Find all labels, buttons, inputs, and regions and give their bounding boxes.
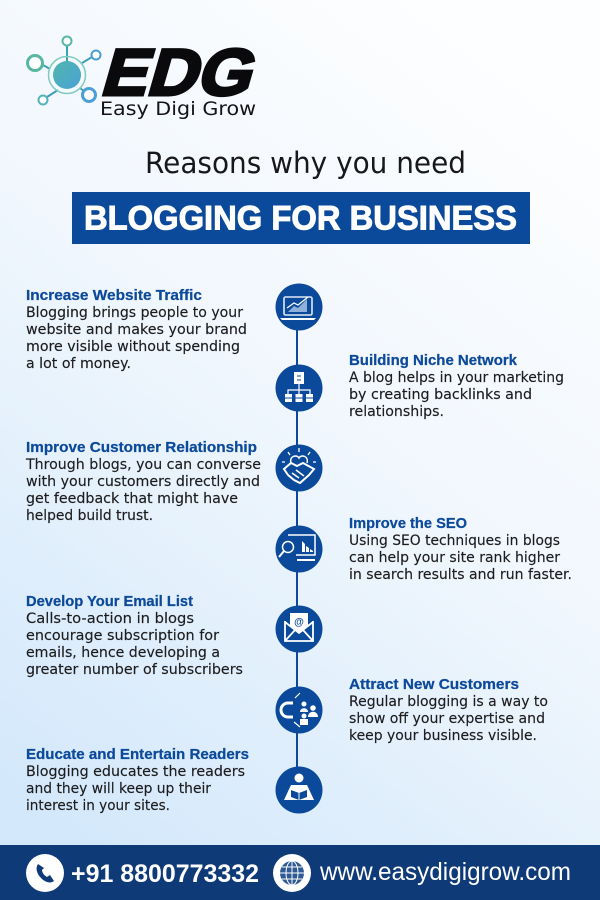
item: Improve Customer Relationship (25, 439, 261, 524)
icon: globe (273, 854, 311, 892)
item: Attract New Customers (349, 676, 548, 744)
item: Building Niche Network: by creating backlinks and (349, 387, 532, 403)
item: Improve the SEO: can help your site rank higher (349, 550, 560, 566)
item: Improve the SEO: Improve the SEO (349, 515, 467, 532)
item: Increase Website Traffic: website and makes your brand (26, 322, 247, 338)
item: Improve Customer Relationship: get feedback that might have (26, 491, 238, 507)
item: Improve the SEO (349, 515, 572, 583)
item: Building Niche Network (349, 352, 564, 420)
title: Reasons why you need (145, 146, 466, 180)
item: Increase Website Traffic (26, 287, 247, 372)
item: Develop Your Email List: emails, hence developing a (26, 645, 220, 661)
icon: handshake (276, 444, 322, 492)
item: Improve Customer Relationship: Through blogs, you can converse (25, 457, 261, 473)
title banner: BLOGGING FOR BUSINESS (84, 200, 517, 238)
item: Attract New Customers: keep your business visible. (349, 728, 537, 744)
item: Increase Website Traffic: Increase Website Traffic (26, 287, 202, 304)
item: Educate and Entertain Readers: and they will keep up their (26, 781, 211, 797)
item: Educate and Entertain Readers: Educate and Entertain Readers (26, 746, 249, 763)
item: Increase Website Traffic: a lot of money. (26, 356, 131, 372)
item: Improve Customer Relationship: with your customers directly and (26, 474, 260, 490)
item: Develop Your Email List: Develop Your Email List (26, 593, 193, 610)
footer bar (0, 845, 600, 900)
item: Improve the SEO: in search results and run faster. (349, 567, 572, 583)
icon: building network (276, 364, 322, 412)
icon: email envelope (276, 606, 322, 652)
item: Develop Your Email List: Calls-to-action in blogs (26, 611, 194, 627)
item: Improve Customer Relationship: helped build trust. (26, 508, 153, 524)
item: Building Niche Network: A blog helps in your marketing (349, 370, 564, 386)
icon: laptop chart (276, 284, 322, 330)
logo tagline: Easy Digi Grow (100, 98, 256, 120)
item: Increase Website Traffic: more visible without spending (26, 339, 240, 355)
item: Develop Your Email List (26, 593, 243, 678)
timeline (276, 284, 322, 814)
item: Attract New Customers: Attract New Customers (349, 676, 519, 693)
item: Educate and Entertain Readers: Blogging educates the readers (26, 764, 245, 780)
item: Improve Customer Relationship: Improve Customer Relationship (26, 439, 257, 456)
item: Educate and Entertain Readers: interest in your sites. (26, 798, 170, 814)
item: Develop Your Email List: greater number of subscribers (26, 662, 243, 678)
logo (28, 36, 266, 120)
item: Improve the SEO: Using SEO techniques in blogs (349, 533, 560, 549)
item: Increase Website Traffic: Blogging brings people to your (26, 305, 243, 321)
logo icon: network node (28, 36, 100, 104)
timeline line (296, 307, 298, 790)
item: Building Niche Network: relationships. (349, 404, 444, 420)
item: Attract New Customers: Regular blogging is a way to (349, 694, 548, 710)
icon: phone (26, 854, 64, 892)
icon: email envelope: @ (294, 617, 304, 628)
item: Building Niche Network: Building Niche Network (349, 352, 518, 369)
icon: magnet and customers (276, 686, 322, 734)
item: Develop Your Email List: encourage subscription for (26, 628, 219, 644)
item: Educate and Entertain Readers (26, 746, 249, 814)
phone number: +91 8800773332 (71, 860, 259, 888)
website: www.easydigigrow.com (319, 858, 571, 886)
logo wordmark: EDG: EDG (95, 36, 266, 110)
item: Attract New Customers: show off your expertise and (349, 711, 545, 727)
icon: SEO monitor (276, 526, 322, 572)
icon: reader (276, 766, 322, 814)
